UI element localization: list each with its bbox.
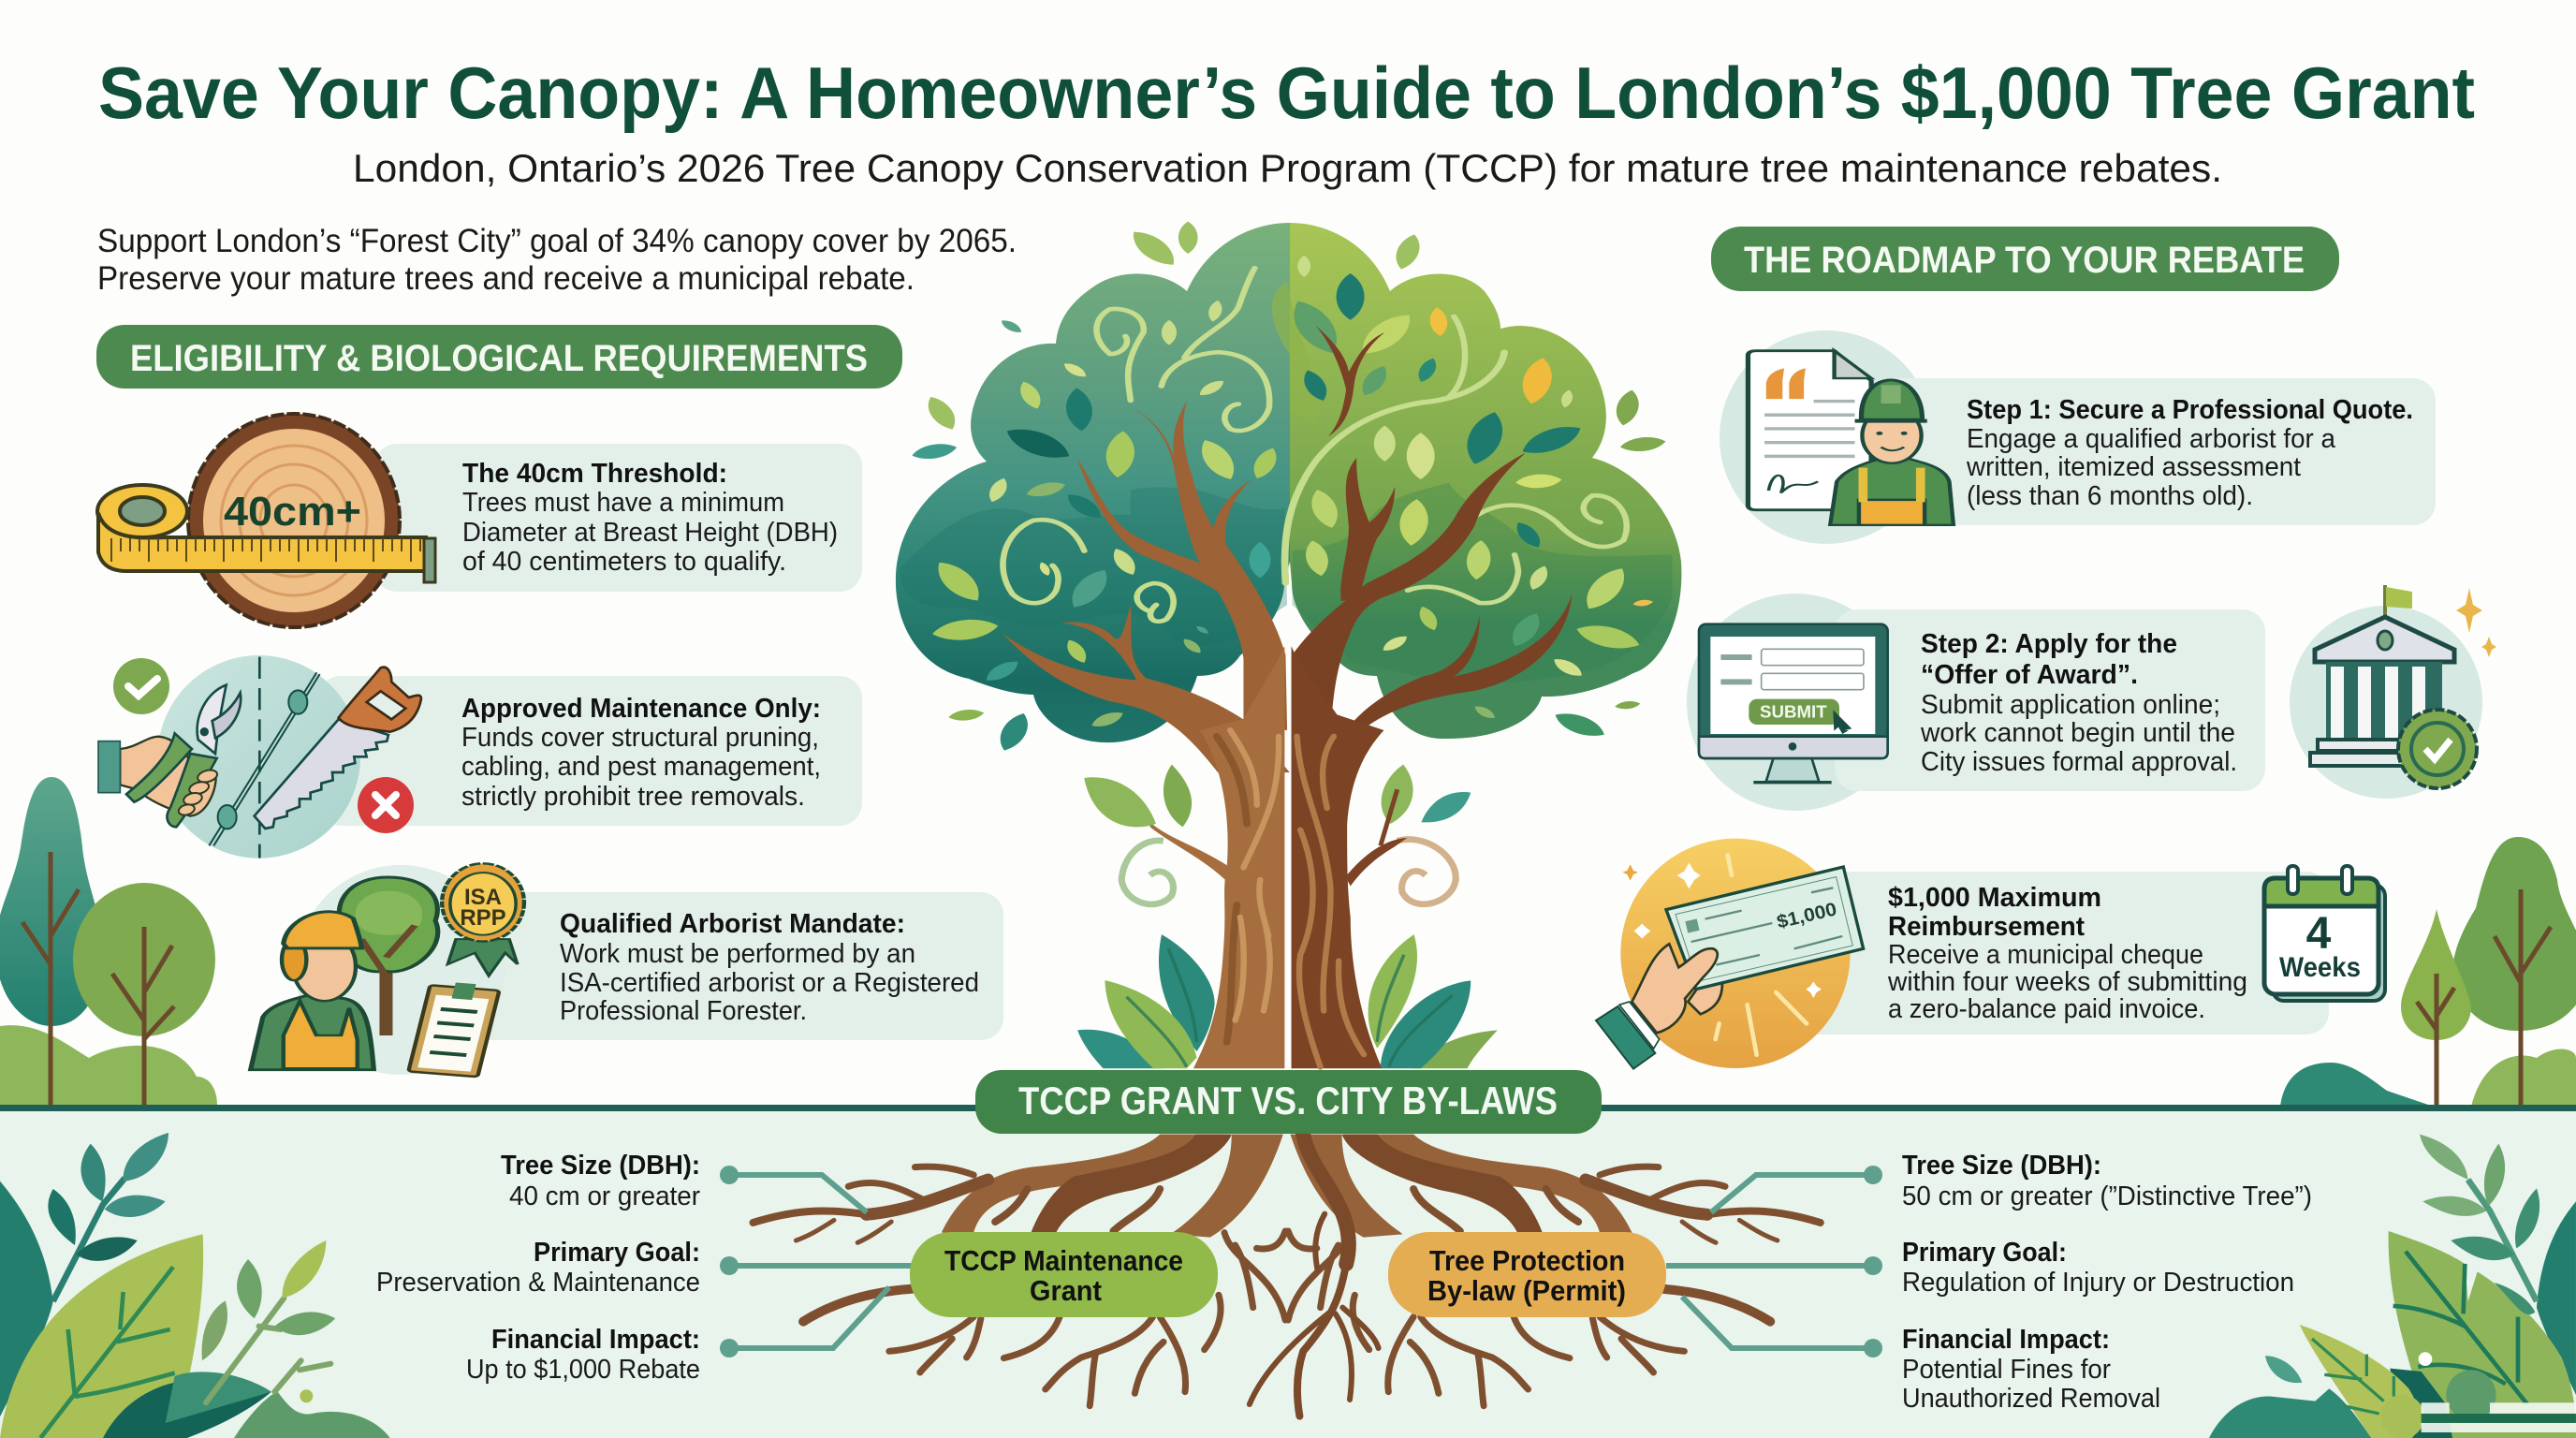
image artifact strip xyxy=(2422,1402,2576,1432)
foliage: bottom right xyxy=(2209,1135,2576,1438)
panel: step 3 reimbursement xyxy=(1596,839,2385,1069)
comparison text: TCCP grant: Up to $1,000 Rebate xyxy=(466,1355,700,1385)
intro text: Preserve your mature trees and receive a municipal rebate. xyxy=(97,260,915,297)
icon: prohibited cross xyxy=(358,777,414,833)
canopy interior drawn in zoomed coordinates xyxy=(900,221,1672,772)
subtitle: London, Ontario’s 2026 Tree Canopy Conservation Program (TCCP) for mature tree maintenance rebates. xyxy=(353,146,2222,190)
section divider xyxy=(0,1105,2576,1111)
badge text: RPP xyxy=(460,905,506,931)
eligibility heading pill: ELIGIBILITY & BIOLOGICAL REQUIREMENTS xyxy=(130,338,868,379)
eligibility heading pill xyxy=(96,325,902,389)
canopy leaves right xyxy=(1282,256,1654,721)
floating leaves around the canopy xyxy=(910,221,1667,754)
icon: cheque in hand on gold coin: $1,000 xyxy=(1775,899,1838,933)
TCCP maintenance grant node: TCCP Maintenance xyxy=(944,1244,1183,1277)
icon: tree cross-section with measuring tape xyxy=(97,414,435,627)
bark streaks xyxy=(1217,730,1364,1067)
intro text xyxy=(97,223,1017,297)
item text: Work must be performed by an xyxy=(560,939,915,969)
comparison text: by-law: Regulation of Injury or Destruction xyxy=(1902,1268,2294,1298)
left root system xyxy=(753,1135,1285,1406)
step text xyxy=(1966,395,2413,511)
step text xyxy=(1920,629,2237,777)
connector lines: by-law xyxy=(1666,1166,1882,1357)
icon: monitor with submit form xyxy=(1699,624,1888,783)
step text: Step 2: Apply for the xyxy=(1921,629,2177,659)
trunk left half xyxy=(1193,646,1284,1068)
icon: 4 weeks calendar xyxy=(2264,866,2385,1001)
comparison heading pill: TCCP GRANT VS. CITY BY-LAWS xyxy=(1018,1078,1558,1123)
icon: quote document and arborist xyxy=(1748,351,1954,525)
item text: ISA-certified arborist or a Registered xyxy=(560,968,979,998)
comparison text: TCCP grant: 40 cm or greater xyxy=(509,1181,700,1211)
background trees: right xyxy=(2280,837,2576,1107)
mottled shading xyxy=(900,283,1672,683)
tree protection by-law node xyxy=(1388,1232,1666,1317)
icon: tree cross-section with measuring tape: 40cm+ xyxy=(224,489,361,535)
comparison text: TCCP grant: Preservation & Maintenance xyxy=(376,1268,700,1298)
base leaves xyxy=(1077,934,1498,1068)
item text: Trees must have a minimum xyxy=(462,488,784,518)
saw xyxy=(255,719,388,829)
roadmap heading pill: THE ROADMAP TO YOUR REBATE xyxy=(1744,240,2305,281)
item text: Diameter at Breast Height (DBH) xyxy=(462,518,838,548)
item text: Funds cover structural pruning, xyxy=(461,723,819,753)
step text: work cannot begin until the xyxy=(1920,718,2235,748)
item text: within four weeks of submitting xyxy=(1887,967,2247,997)
icon circle backdrop xyxy=(296,865,505,1075)
comparison text: by-law: Unauthorized Removal xyxy=(1902,1384,2160,1414)
trunk right half xyxy=(1292,646,1383,1068)
right side shoot with swirl and leaves xyxy=(1345,765,1471,904)
tree protection by-law node: Tree Protection xyxy=(1429,1244,1625,1277)
item text: $1,000 Maximum xyxy=(1888,883,2101,913)
item text: strictly prohibit tree removals. xyxy=(461,782,805,812)
TCCP maintenance grant node xyxy=(910,1232,1218,1317)
connector lines: TCCP grant xyxy=(720,1166,912,1357)
roadmap heading pill xyxy=(1711,227,2339,291)
step text: (less than 6 months old). xyxy=(1967,481,2253,511)
right root system, mirrored xyxy=(1288,1135,1821,1406)
item text xyxy=(461,694,821,812)
item text xyxy=(560,909,979,1026)
item text: Reimbursement xyxy=(1888,912,2085,942)
vines xyxy=(1003,268,1627,622)
comparison text: by-law: Financial Impact: xyxy=(1902,1325,2110,1355)
panel: 40cm threshold xyxy=(97,414,862,627)
comparison text: by-law: Potential Fines for xyxy=(1902,1355,2111,1385)
approval seal xyxy=(2398,710,2477,788)
icon: approved check xyxy=(113,658,169,714)
item text: of 40 centimeters to qualify. xyxy=(462,547,786,577)
panel: step 2 xyxy=(1687,594,2265,811)
badge text: ISA xyxy=(464,885,502,910)
central tap root xyxy=(1250,1135,1379,1416)
comparison text: TCCP grant: Financial Impact: xyxy=(491,1325,700,1355)
TCCP maintenance grant node: Grant xyxy=(1030,1274,1102,1307)
comparison text: TCCP grant: Tree Size (DBH): xyxy=(501,1151,700,1181)
item text: The 40cm Threshold: xyxy=(462,459,727,489)
item text: Qualified Arborist Mandate: xyxy=(560,909,905,939)
intro text: Support London’s “Forest City” goal of 34% canopy cover by 2065. xyxy=(97,223,1017,259)
comparison heading pill xyxy=(975,1070,1602,1134)
badge text xyxy=(460,885,506,931)
item text: a zero-balance paid invoice. xyxy=(1888,994,2205,1024)
step text: Step 1: Secure a Professional Quote. xyxy=(1967,395,2413,425)
background trees: left xyxy=(0,777,217,1105)
panel: qualified arborist xyxy=(251,863,1003,1077)
left side shoot with swirl and leaves xyxy=(1084,765,1230,904)
tree protection by-law node: By-law (Permit) xyxy=(1427,1274,1626,1307)
tree canopy xyxy=(896,221,1681,772)
comparison text: by-law: Primary Goal: xyxy=(1902,1238,2067,1268)
hand xyxy=(120,737,216,816)
item text xyxy=(462,459,838,577)
item text: Approved Maintenance Only: xyxy=(461,694,821,724)
icon: pruners, cable and saw xyxy=(98,655,421,858)
item text xyxy=(1887,883,2247,1024)
tree trunk xyxy=(1077,646,1498,1068)
step text: Engage a qualified arborist for a xyxy=(1967,424,2336,454)
comparison text: by-law xyxy=(1902,1151,2312,1414)
comparison text: by-law: Tree Size (DBH): xyxy=(1902,1151,2101,1181)
icon: city hall approval xyxy=(2290,585,2496,799)
foliage: bottom left xyxy=(0,1133,390,1438)
step text: “Offer of Award”. xyxy=(1921,660,2138,690)
panel: step 1 xyxy=(1720,330,2436,544)
canopy leaves left xyxy=(928,300,1282,730)
icon: monitor with submit form: SUBMIT xyxy=(1760,702,1827,722)
icon: 4 weeks calendar: 4 xyxy=(2306,909,2332,959)
title: Save Your Canopy: A Homeowner’s Guide to London’s $1,000 Tree Grant xyxy=(98,51,2475,134)
item text: cabling, and pest management, xyxy=(461,752,821,782)
sparkles xyxy=(2456,588,2496,657)
item text: Professional Forester. xyxy=(560,996,807,1026)
right branches xyxy=(1293,325,1573,772)
pruner blades xyxy=(198,685,227,754)
step text: City issues formal approval. xyxy=(1921,747,2237,777)
pruner handles xyxy=(126,733,192,802)
step text: Submit application online; xyxy=(1921,690,2220,720)
left branches xyxy=(1003,401,1290,772)
comparison section background xyxy=(0,1108,2576,1438)
comparison text: TCCP grant: Primary Goal: xyxy=(534,1238,700,1268)
comparison text: TCCP grant xyxy=(376,1151,700,1385)
panel: approved maintenance xyxy=(98,655,862,858)
icon: 4 weeks calendar: Weeks xyxy=(2279,952,2361,983)
item text: Receive a municipal cheque xyxy=(1888,940,2203,970)
roots xyxy=(753,1135,1821,1416)
comparison text: by-law: 50 cm or greater (”Distinctive Tree”) xyxy=(1902,1181,2312,1211)
step text: written, itemized assessment xyxy=(1966,452,2301,482)
icon: cheque in hand on gold coin xyxy=(1596,839,1864,1069)
icon: arborist, tree and clipboard xyxy=(251,863,524,1077)
